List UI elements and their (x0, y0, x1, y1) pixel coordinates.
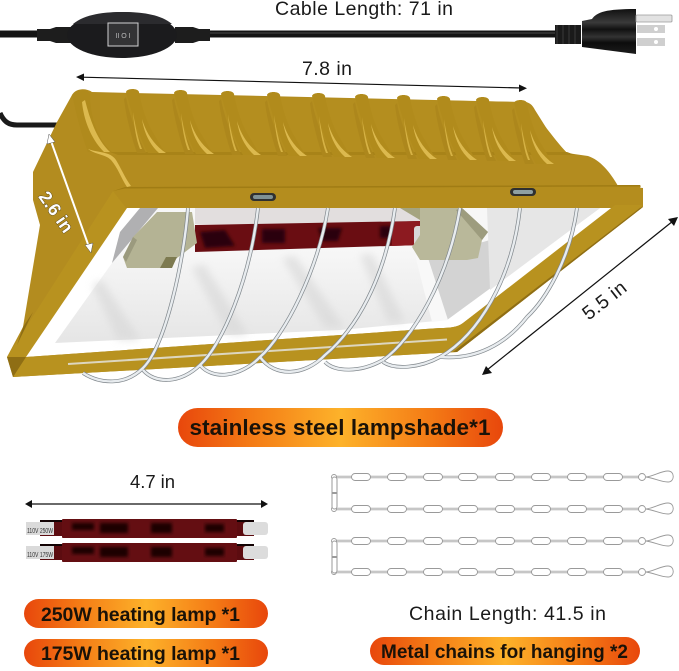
plug (555, 9, 672, 54)
inline rocker switch (37, 12, 210, 58)
175W pill: 175W heating lamp *1 (41, 643, 240, 665)
depth arrow (47, 134, 93, 253)
bottom frame edge (13, 205, 643, 377)
wire guard (83, 208, 577, 381)
reflector interior (55, 208, 600, 343)
second chain (332, 535, 673, 577)
175W heating tube: 110V 175W (27, 550, 54, 559)
power cable with switch and plug (0, 9, 672, 58)
right tube end cap (414, 226, 426, 246)
175W heating tube (26, 543, 268, 562)
chain length label: Chain Length: 41.5 in (409, 603, 606, 625)
length arrow (482, 217, 678, 375)
lamp housing (7, 89, 643, 377)
left end rib (72, 90, 131, 187)
first chain (332, 471, 673, 514)
tube length arrow (25, 500, 268, 508)
light strip on bottom frame (68, 340, 447, 364)
lampshade pill (178, 408, 503, 447)
lampshade pill: stainless steel lampshade*1 (190, 415, 490, 440)
front frame top face (113, 185, 643, 209)
white reflector rim (26, 208, 615, 357)
chains pill: Metal chains for hanging *2 (381, 642, 628, 663)
rear ribbed section shading (100, 94, 567, 153)
left lamp holder (123, 212, 197, 268)
rear cable entering lamp (0, 113, 60, 125)
250W heating tube: 110V 250W (27, 526, 54, 535)
175W pill (24, 639, 268, 667)
reflector fold shading (92, 254, 405, 340)
250W pill: 250W heating lamp *1 (41, 604, 240, 626)
length label: 5.5 in (578, 277, 631, 325)
slots on frame (250, 188, 536, 201)
width arrow (76, 74, 527, 92)
width dimension label: 7.8 in (302, 58, 352, 80)
housing body (7, 89, 643, 377)
inline rocker switch: II O I (115, 33, 131, 40)
chains pill (370, 637, 640, 665)
250W heating tube (26, 519, 268, 538)
right lamp holder (412, 208, 488, 260)
tube length label: 4.7 in (130, 471, 175, 492)
250W pill (24, 599, 268, 628)
front frame left face (7, 191, 127, 357)
depth label: 2.6 in (35, 187, 77, 237)
heating tube (195, 221, 420, 252)
roof ribs (124, 89, 554, 164)
